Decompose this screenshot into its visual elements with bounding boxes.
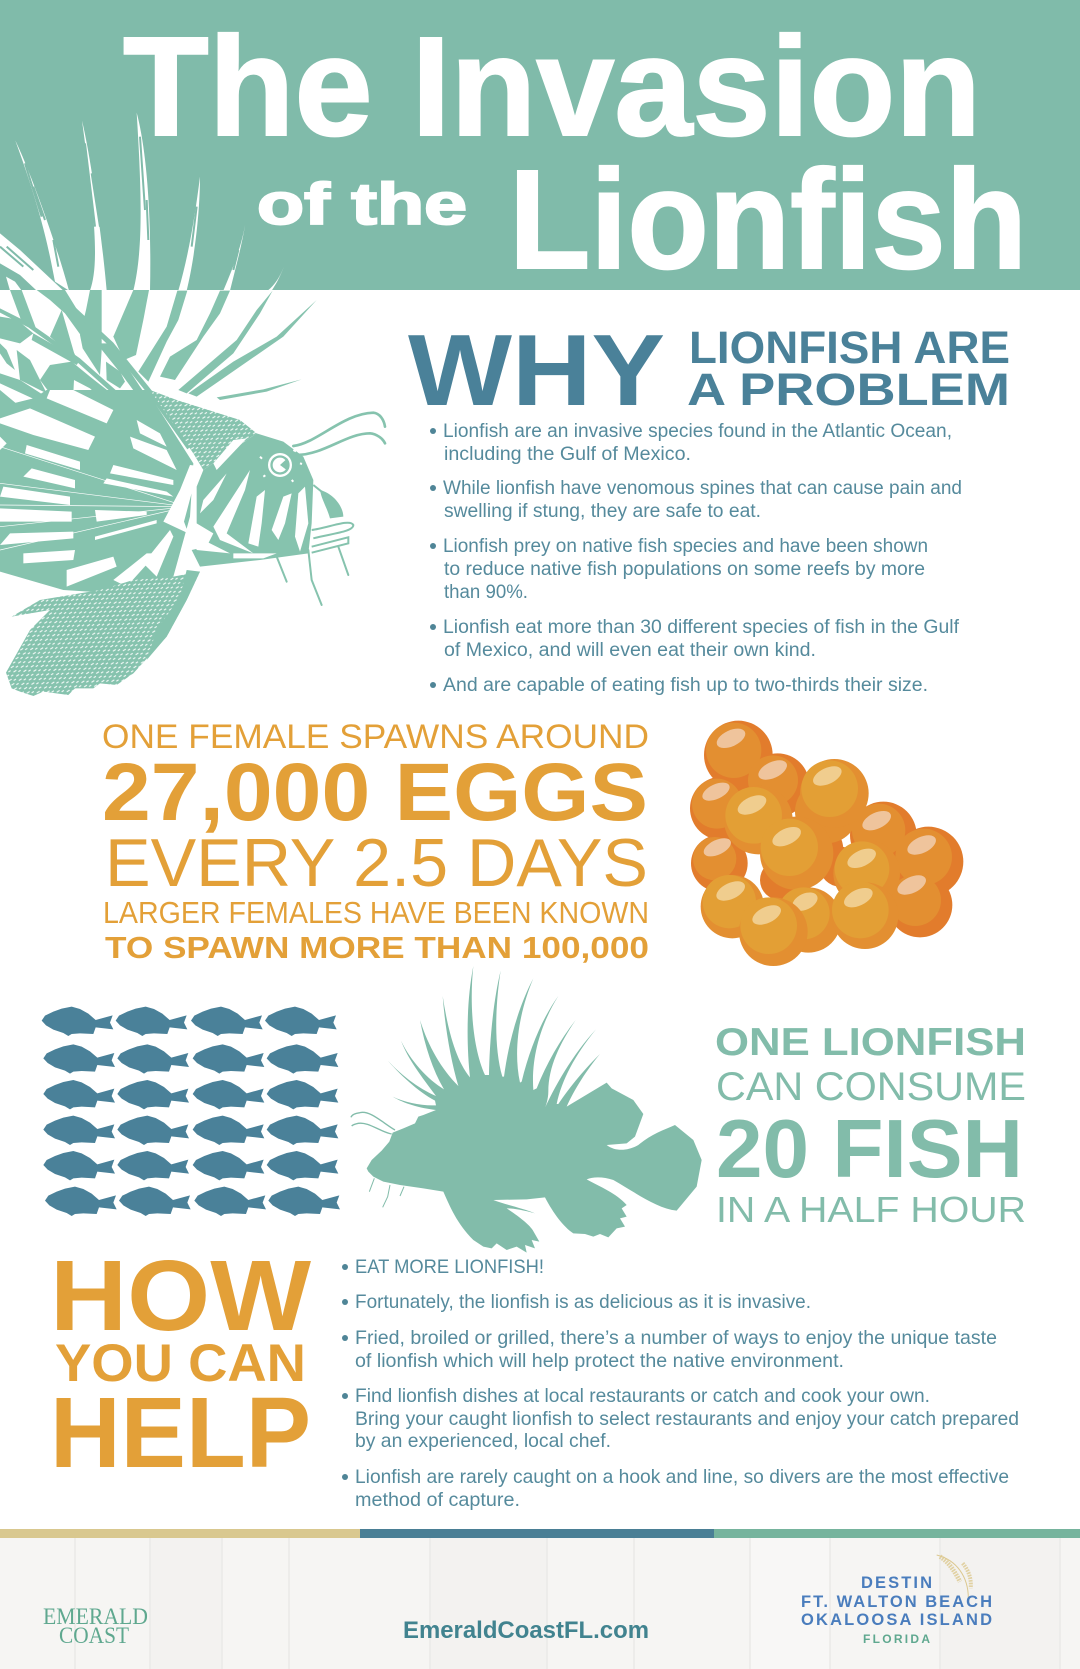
- heading: how you can help: [50, 1240, 312, 1489]
- stat: eggs spawned: ONE FEMALE SPAWNS AROUND: [102, 718, 649, 756]
- text block: problem bullets: Lionfish prey on native fish species and have been shown: [443, 536, 928, 557]
- icon: sea oats: [937, 1555, 971, 1598]
- heading: why lionfish are a problem: LIONFISH ARE: [689, 322, 1010, 373]
- heading: how you can help: YOU CAN: [55, 1334, 306, 1393]
- stat: fish consumed: 20 FISH: [716, 1102, 1023, 1195]
- stat: fish consumed: CAN CONSUME: [716, 1065, 1026, 1109]
- text block: problem bullets: than 90%.: [444, 582, 528, 603]
- text block: help bullets: Bring your caught lionfish to select restaurants and enjoy your catch prepared: [355, 1408, 1019, 1430]
- heading: how you can help: HOW: [50, 1240, 312, 1352]
- fin fan: [0, 390, 193, 593]
- text block: help bullets: [342, 1256, 1019, 1511]
- body scales: [150, 390, 257, 470]
- wing and membrane below the banner: [0, 290, 191, 450]
- whiskers: [351, 1112, 395, 1134]
- pectoral fan, head and lower fin: [0, 390, 385, 696]
- icon: lionfish silhouette: [351, 966, 702, 1253]
- text block: problem bullets: [430, 421, 962, 696]
- lips: [312, 485, 353, 553]
- footer colour stripe: [0, 1529, 1080, 1538]
- text block: problem bullets: While lionfish have venomous spines that can cause pain and: [443, 478, 962, 499]
- head: [192, 433, 313, 567]
- logo: destin fort walton beach: DESTIN: [861, 1574, 932, 1592]
- stat: eggs spawned: EVERY 2.5 DAYS: [105, 825, 648, 901]
- icon: school of prey fish: [42, 1007, 340, 1216]
- text block: help bullets: Lionfish are rarely caught on a hook and line, so divers are the most effective: [355, 1466, 1009, 1488]
- text block: problem bullets: swelling if stung, they are safe to eat.: [444, 501, 761, 522]
- front eggs: [701, 759, 900, 966]
- logo: emerald coast: EMERALD: [43, 1604, 148, 1629]
- text block: problem bullets: of Mexico, and will even eat their own kind.: [444, 640, 816, 661]
- logo: destin fort walton beach: OKALOOSA ISLAND: [801, 1611, 992, 1629]
- logo: emerald coast: [43, 1604, 148, 1648]
- head streaks: [190, 438, 308, 558]
- stat: eggs spawned: 27,000 EGGS: [102, 747, 648, 838]
- back eggs: [690, 721, 963, 937]
- stat: eggs spawned: LARGER FEMALES HAVE BEEN KNOWN: [103, 895, 649, 930]
- text block: help bullets: by an experienced, local chef.: [355, 1430, 611, 1452]
- heading: how you can help: HELP: [50, 1377, 311, 1489]
- snout: [320, 490, 343, 518]
- text block: help bullets: method of capture.: [355, 1489, 520, 1511]
- stat: eggs spawned: TO SPAWN MORE THAN 100,000: [105, 930, 649, 965]
- text block: help bullets: EAT MORE LIONFISH!: [355, 1256, 544, 1278]
- text block: help bullets: Find lionfish dishes at local restaurants or catch and cook your own.: [355, 1385, 930, 1407]
- stat: eggs spawned: [102, 718, 649, 965]
- stat: fish consumed: ONE LIONFISH: [715, 1021, 1026, 1064]
- logo: emerald coast: COAST: [59, 1623, 129, 1648]
- lower fin: [6, 572, 200, 696]
- main title: [123, 7, 1027, 298]
- stat: fish consumed: [715, 1021, 1026, 1230]
- text block: problem bullets: to reduce native fish populations on some reefs by more: [444, 559, 925, 580]
- website url: EmeraldCoastFL.com: [403, 1617, 649, 1644]
- antennae: [293, 413, 385, 455]
- eye: [259, 444, 302, 486]
- text block: problem bullets: Lionfish eat more than 30 different species of fish in the Gulf: [443, 617, 960, 638]
- text block: help bullets: of lionfish which will help protect the native environment.: [355, 1350, 844, 1372]
- stat: fish consumed: IN A HALF HOUR: [716, 1189, 1026, 1230]
- logo: destin fort walton beach: FLORIDA: [863, 1632, 930, 1646]
- logo: destin fort walton beach: FT. WALTON BEACH: [801, 1593, 992, 1611]
- main title: of the: [257, 172, 467, 237]
- fin rays: [0, 447, 187, 550]
- spine flecks: [0, 137, 238, 270]
- barbels: [369, 1178, 404, 1207]
- icon: egg cluster: [690, 721, 963, 966]
- text block: problem bullets: And are capable of eating fish up to two-thirds their size.: [443, 675, 928, 696]
- text block: help bullets: Fried, broiled or grilled, there’s a number of ways to enjoy the unique taste: [355, 1327, 997, 1349]
- text block: problem bullets: including the Gulf of Mexico.: [444, 444, 691, 465]
- logo: destin fort walton beach: [801, 1555, 992, 1646]
- fan streaks: [0, 390, 203, 587]
- illustration: engraved lionfish: [0, 113, 385, 696]
- heading: why lionfish are a problem: WHY: [408, 315, 665, 427]
- heading: why lionfish are a problem: [408, 315, 1010, 427]
- text block: help bullets: Fortunately, the lionfish is as delicious as it is invasive.: [355, 1291, 811, 1313]
- dorsal spines crossing the banner: [0, 113, 284, 291]
- header banner: [0, 0, 1080, 290]
- heading: why lionfish are a problem: A PROBLEM: [687, 364, 1010, 415]
- footer: wood panel: [0, 1529, 1080, 1669]
- main title: Lionfish: [509, 140, 1027, 298]
- text block: problem bullets: Lionfish are an invasive species found in the Atlantic Ocean,: [443, 421, 952, 442]
- main title: The Invasion: [123, 7, 981, 165]
- barbels: [277, 547, 348, 605]
